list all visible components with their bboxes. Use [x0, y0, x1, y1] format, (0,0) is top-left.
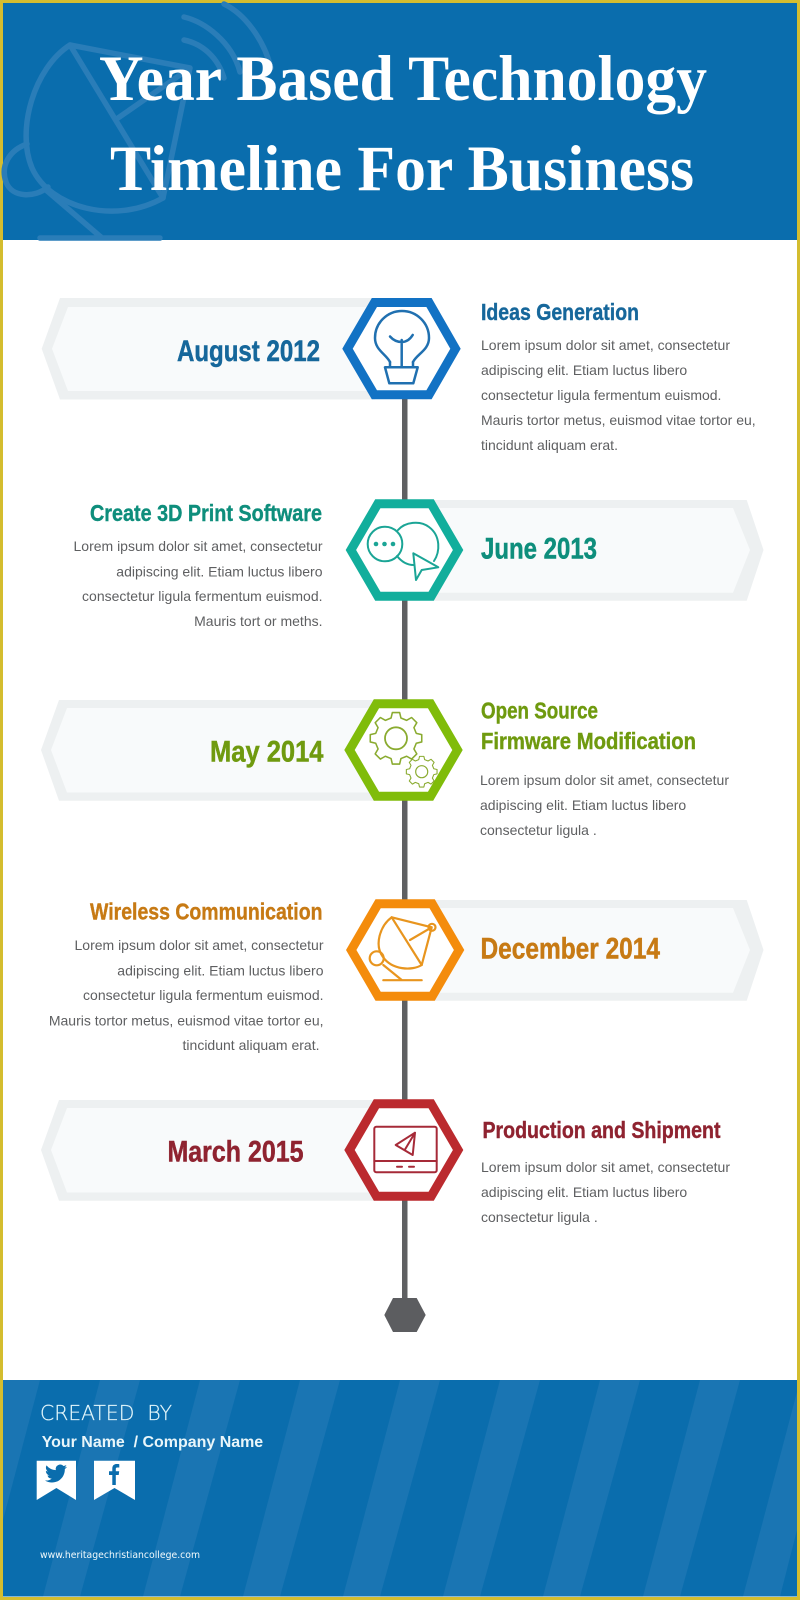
description: Mauris tort or meths.	[194, 613, 322, 629]
description: Lorem ipsum dolor sit amet, consectetur	[74, 937, 324, 953]
description: consectetur ligula fermentum euismod.	[481, 387, 721, 403]
description: Wireless Communication	[90, 898, 322, 924]
description: consectetur ligula .	[480, 822, 597, 838]
description: adipiscing elit. Etiam luctus libero	[116, 564, 323, 580]
hexagon badge: laptop with paper plane	[350, 1104, 458, 1196]
milestone 5: March 2015	[41, 1100, 730, 1225]
date ribbon	[430, 900, 764, 1001]
description: adipiscing elit. Etiam luctus libero	[481, 362, 687, 378]
author name: Your Name / Company Name	[42, 1434, 263, 1451]
hexagon badge: chat and cursor	[351, 504, 458, 596]
title: Timeline For Business	[110, 133, 694, 205]
description: Create 3D Print Software	[90, 500, 322, 526]
description: tincidunt aliquam erat.	[481, 437, 618, 453]
date ribbon: August 2012	[177, 335, 320, 368]
description	[481, 1117, 730, 1225]
date ribbon: March 2015	[168, 1136, 304, 1168]
description: Firmware Modification	[481, 728, 696, 754]
description: adipiscing elit. Etiam luctus libero	[481, 1184, 687, 1200]
date ribbon	[430, 500, 764, 601]
description: Lorem ipsum dolor sit amet, consectetur	[481, 1159, 730, 1175]
description	[49, 898, 324, 1053]
hexagon badge: satellite dish	[351, 904, 459, 996]
description: consectetur ligula fermentum euismod.	[82, 588, 322, 604]
milestone 4: December 2014	[49, 898, 764, 1053]
description: Mauris tortor metus, euismod vitae tortor eu,	[49, 1012, 324, 1028]
end marker hexagon	[384, 1298, 426, 1332]
date ribbon: June 2013	[481, 532, 597, 565]
date ribbon: May 2014	[210, 736, 324, 768]
description: consectetur ligula fermentum euismod.	[83, 987, 324, 1003]
hexagon badge: gears	[350, 704, 458, 796]
description: adipiscing elit. Etiam luctus libero	[480, 797, 686, 813]
description	[74, 500, 323, 629]
title: Year Based Technology	[99, 43, 707, 115]
description: consectetur ligula .	[481, 1209, 598, 1225]
date ribbon	[42, 298, 375, 400]
date ribbon: December 2014	[480, 932, 660, 966]
icon: twitter ribbon	[37, 1461, 76, 1500]
description: Lorem ipsum dolor sit amet, consectetur	[480, 772, 729, 788]
description	[480, 698, 729, 838]
description: Production and Shipment	[482, 1117, 721, 1143]
title	[99, 43, 707, 205]
footer banner	[3, 1380, 797, 1596]
header banner	[3, 3, 797, 240]
date ribbon	[41, 1100, 375, 1201]
description: adipiscing elit. Etiam luctus libero	[117, 962, 324, 978]
icon: facebook ribbon	[94, 1461, 135, 1500]
hexagon badge: lightbulb	[348, 302, 456, 395]
description: tincidunt aliquam erat.	[183, 1037, 320, 1053]
created by label: CREATED BY	[40, 1401, 172, 1425]
website url: www.heritagechristiancollege.com	[40, 1550, 200, 1561]
description: Mauris tortor metus, euismod vitae tortor eu,	[481, 412, 756, 428]
milestone 2: June 2013	[74, 500, 764, 629]
description	[481, 299, 756, 453]
description: Ideas Generation	[481, 299, 639, 325]
description: Lorem ipsum dolor sit amet, consectetur	[74, 538, 323, 554]
milestone 3: May 2014	[41, 698, 729, 838]
icon: satellite dish watermark	[4, 4, 271, 238]
timeline spine	[402, 395, 408, 1305]
milestone 1: August 2012	[42, 298, 756, 453]
description: Lorem ipsum dolor sit amet, consectetur	[481, 337, 730, 353]
description: Open Source	[481, 698, 598, 724]
date ribbon	[41, 700, 375, 801]
